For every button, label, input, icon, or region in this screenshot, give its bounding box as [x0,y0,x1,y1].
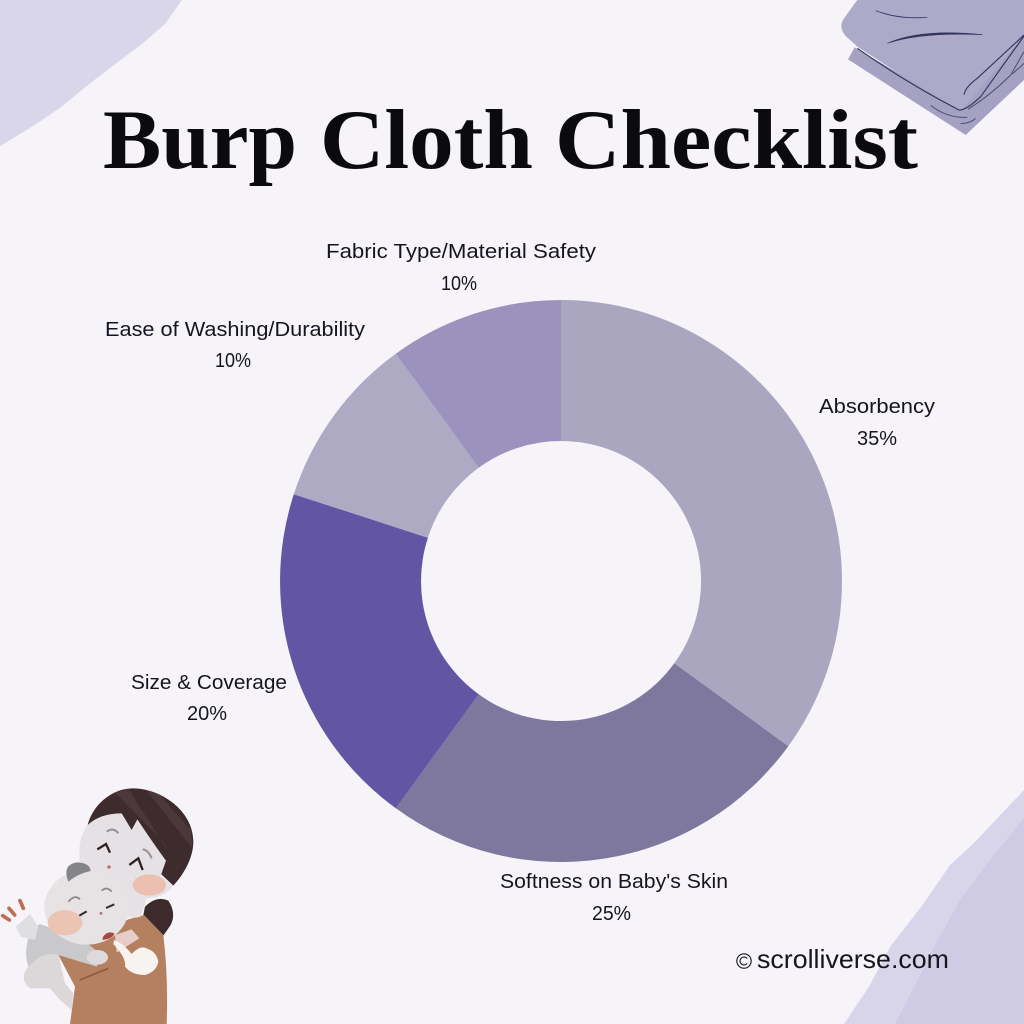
mother face [79,813,173,918]
credit: scrolliverse.com: scrolliverse.com [757,944,949,974]
baby bib [115,929,139,953]
baby head [44,870,129,945]
slice: Size & Coverage 20% [280,494,479,808]
label: Softness on Baby's Skin: Softness on Baby's Skin [500,870,728,893]
label: Size & Coverage: 20% [187,702,227,725]
label: Size & Coverage: Size & Coverage [131,671,287,694]
label: Ease of Washing/Durability: Ease of Washing/Durability [105,318,366,341]
label: Fabric Type/Material Safety [326,240,597,295]
icon: folded cloth [841,0,1024,135]
title: Checklist [555,93,918,187]
illustration: mother burping baby [3,788,193,1024]
title [103,93,918,187]
slice: Fabric Type/Material Safety 10% [396,300,561,468]
decorative corner: top left [0,0,182,146]
baby eyes and brows [79,904,114,916]
title: Burp [103,93,297,187]
baby hand [87,950,108,965]
slice: Absorbency 35% [561,300,842,746]
motion marks [3,901,23,920]
baby blush [48,910,82,935]
label: Ease of Washing/Durability: 10% [215,349,251,372]
label: Fabric Type/Material Safety: Fabric Type/Material Safety [326,240,597,263]
baby hair tuft [66,862,91,882]
mother blush [133,874,166,896]
label: Softness on Baby's Skin: 25% [592,902,631,925]
slice: Ease of Washing/Durability 10% [294,354,479,538]
slice: Softness on Baby's Skin 25% [396,663,788,862]
label: Absorbency [819,395,936,450]
label: Absorbency: Absorbency [819,395,936,418]
label: Ease of Washing/Durability [105,318,366,372]
label: Size & Coverage [131,671,287,725]
donut chart [280,300,842,862]
hair bun [143,899,173,936]
title: Cloth [320,93,533,187]
mother hair [88,788,193,886]
mother arm line [80,968,108,980]
decorative corner: bottom right [844,790,1024,1024]
baby mouth [103,932,114,940]
burp cloud [113,940,158,975]
baby body [26,924,102,967]
label: Absorbency: 35% [857,427,897,450]
label: Softness on Baby's Skin [500,870,728,925]
label: Fabric Type/Material Safety: 10% [441,272,477,295]
mother eyes and brows [97,844,143,870]
mother body [58,915,167,1024]
